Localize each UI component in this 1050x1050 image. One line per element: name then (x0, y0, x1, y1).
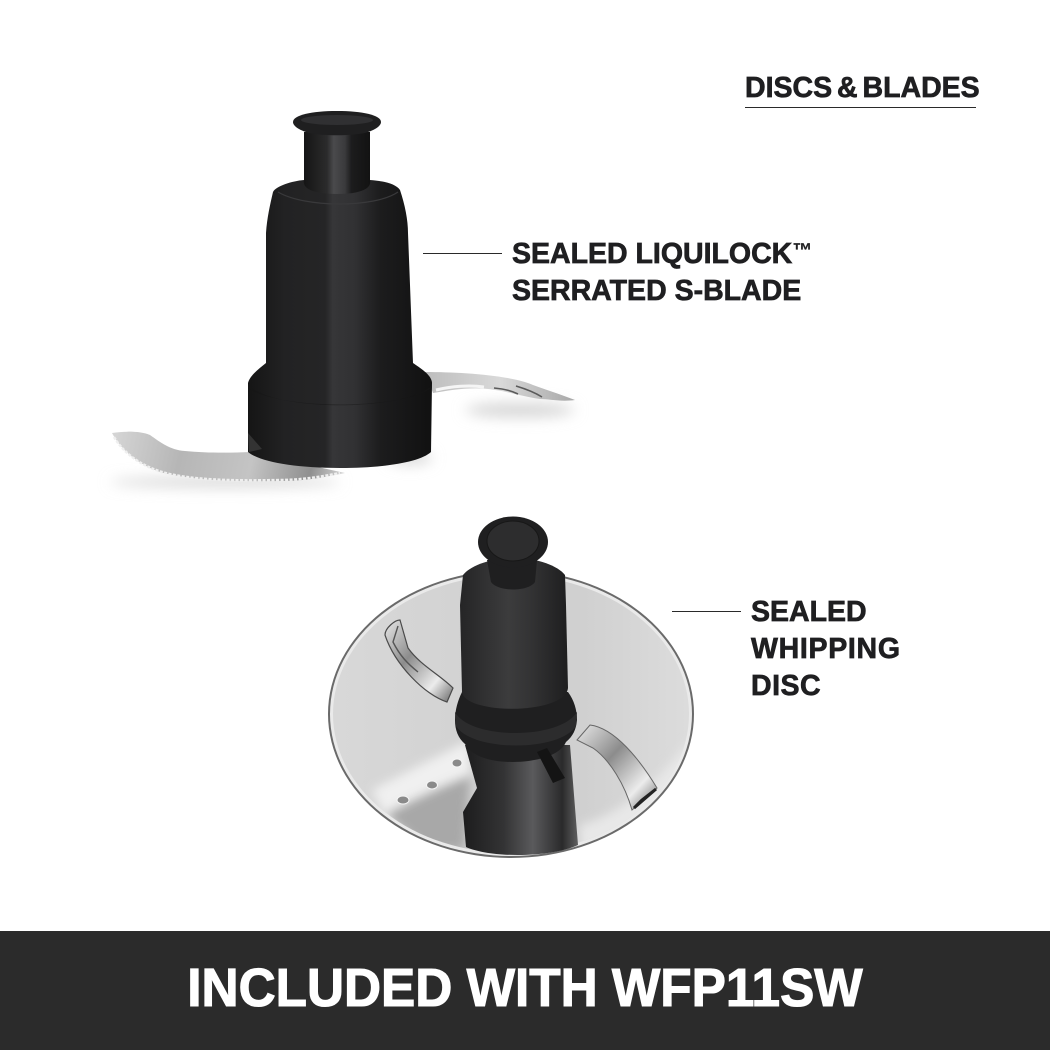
illustration: whipping disc (328, 516, 694, 858)
knob (478, 516, 548, 568)
right blade edge (425, 372, 575, 401)
blade shadows (110, 403, 575, 487)
left lifting tab (385, 620, 453, 702)
footer banner (0, 931, 1050, 1050)
disc plate (328, 570, 694, 860)
stem (304, 132, 370, 194)
right lifting tab (577, 725, 657, 810)
locking tab (537, 748, 565, 783)
heading: discs and blades: DISCS & BLADES (745, 72, 980, 104)
main housing (248, 180, 432, 468)
housing bevels (248, 192, 432, 452)
illustration: s-blade (112, 111, 575, 492)
dark reflection (463, 745, 578, 855)
banner title: INCLUDED WITH WFP11SW (187, 958, 863, 1018)
cap (293, 111, 381, 135)
label: sealed whipping disc (672, 596, 901, 702)
shaft (460, 558, 568, 709)
drain holes (397, 759, 462, 804)
label: sealed liquilock serrated s-blade: SERRATED S-BLADE (512, 275, 801, 307)
label: sealed liquilock serrated s-blade (423, 238, 812, 307)
left blade edge (112, 432, 345, 481)
collar ring (455, 712, 577, 746)
shaft neck (487, 560, 537, 590)
label: sealed whipping disc: WHIPPING (751, 633, 901, 665)
label: sealed liquilock serrated s-blade: SEALED LIQUILOCK™ (512, 238, 812, 270)
label: sealed whipping disc: DISC (751, 670, 821, 702)
shaft collar (455, 692, 577, 762)
label: sealed whipping disc: SEALED (751, 596, 867, 628)
